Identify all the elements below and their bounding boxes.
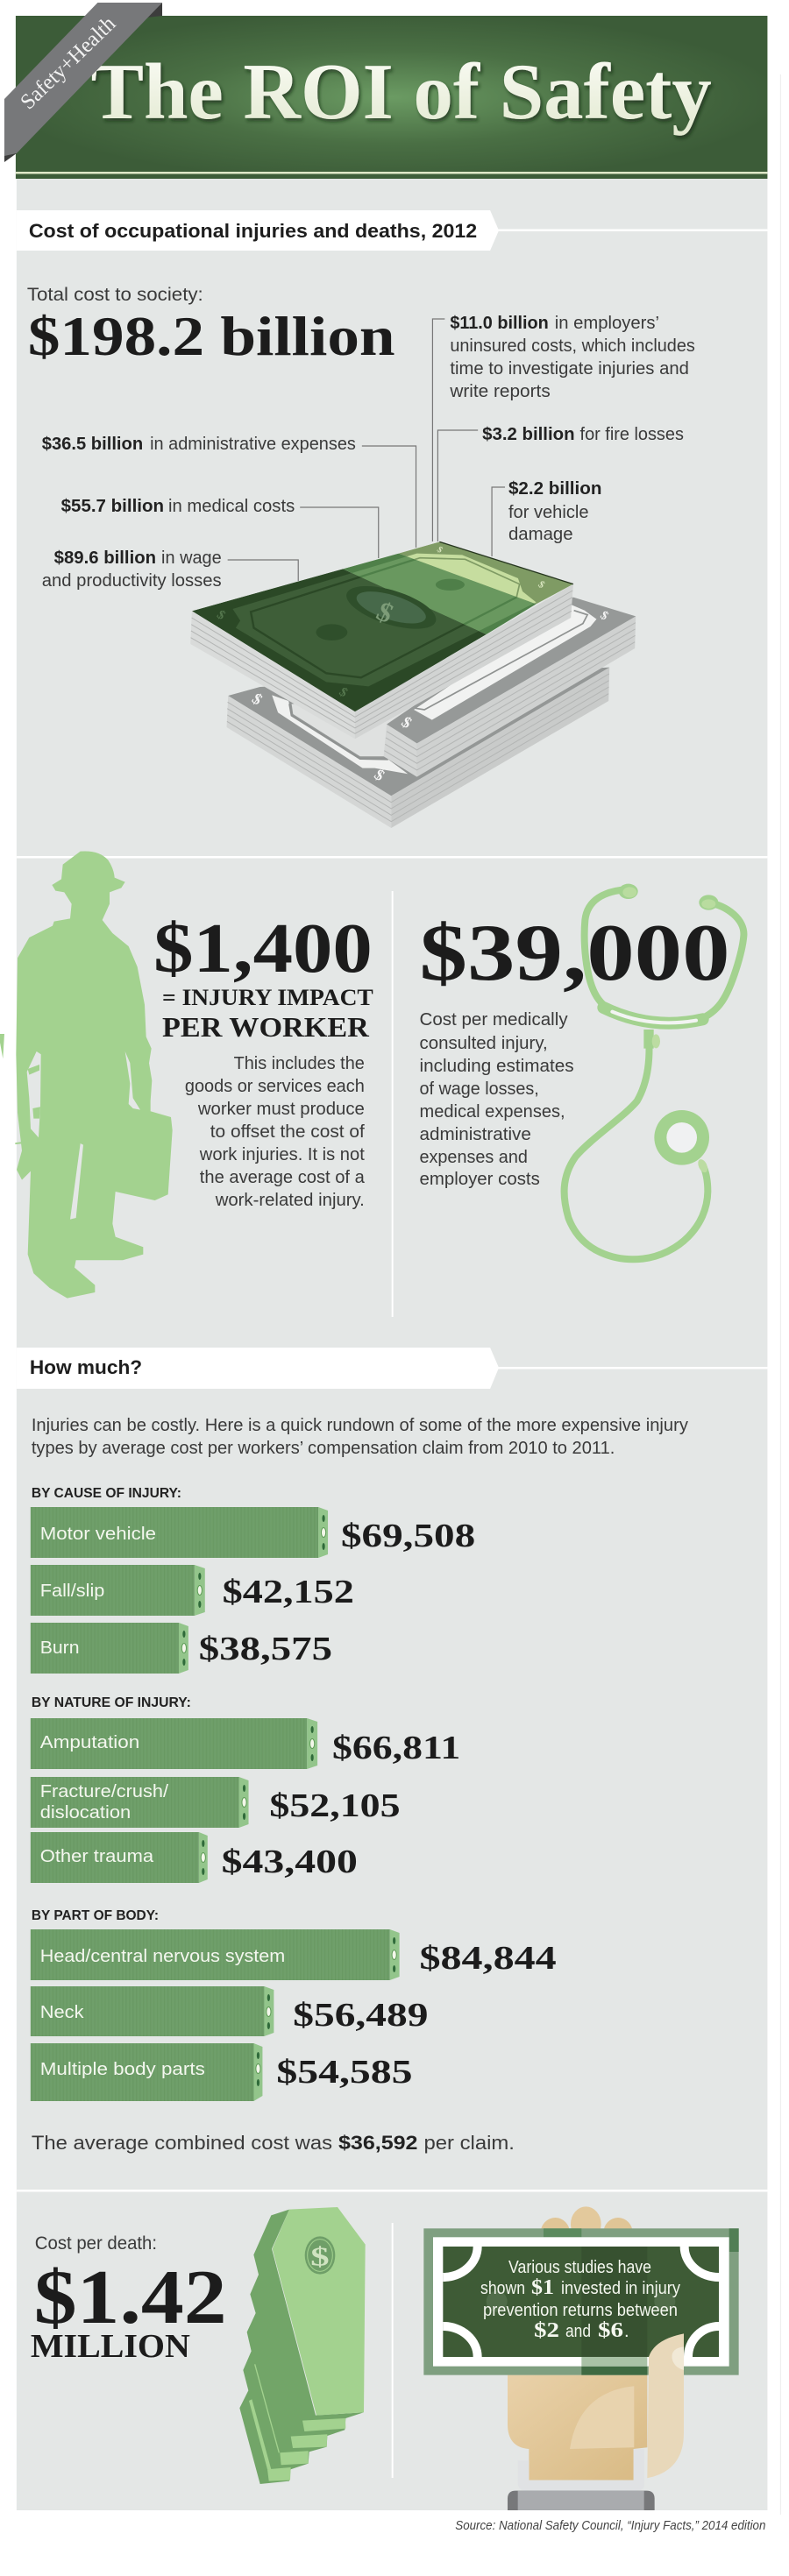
bar: neck <box>31 1986 428 2036</box>
intro text <box>32 1416 688 1458</box>
stat: injury impact per worker: $1,400 <box>153 910 373 987</box>
divider <box>17 856 767 859</box>
callout: vehicle: $2.2 billion <box>508 479 601 499</box>
description: administrative <box>419 1125 531 1144</box>
total cost block: $198.2 billion <box>28 305 395 367</box>
top stack: $ <box>435 545 444 556</box>
title banner <box>4 3 767 179</box>
bar: neck: $56,489 <box>293 1997 428 2034</box>
description: to offset the cost of <box>210 1122 365 1142</box>
description: including estimates <box>419 1057 574 1076</box>
divider <box>17 2190 767 2192</box>
icon: coffin of money <box>239 2207 366 2484</box>
bar: burn <box>31 1623 332 1674</box>
bar: head: $84,844 <box>419 1940 557 1977</box>
intro text: Injuries can be costly. Here is a quick rundown of some of the more expensive injury <box>32 1416 688 1435</box>
stat: cost per death <box>31 2233 227 2365</box>
callout: wage <box>42 548 298 591</box>
total cost block: Total cost to society: <box>27 285 203 305</box>
description <box>419 1010 574 1189</box>
text: average combined cost: The average combined cost was <box>32 2132 332 2154</box>
chart: by part of body <box>31 1908 557 2101</box>
callout: medical: in medical costs <box>168 497 295 516</box>
bar: multiple: $54,585 <box>276 2054 413 2091</box>
bar: fall/slip: $42,152 <box>223 1574 354 1610</box>
total cost block <box>27 285 395 367</box>
callout: uninsured costs: write reports <box>449 382 551 401</box>
bar: head: Head/central nervous system <box>40 1947 285 1966</box>
callout: administrative: in administrative expenses <box>150 435 356 454</box>
callout: uninsured costs: uninsured costs, which includes <box>450 336 695 356</box>
icon: stacks of money <box>190 541 636 828</box>
section header: cost of injuries <box>17 210 767 251</box>
callout: fire losses: $3.2 billion <box>482 425 575 444</box>
text: average combined cost: $36,592 <box>338 2132 418 2154</box>
middle stack <box>384 598 636 777</box>
chart: by cause of injury <box>31 1486 475 1674</box>
description: Cost per medically <box>419 1010 568 1030</box>
callout: uninsured costs: in employers’ <box>555 314 659 333</box>
callout: administrative: $36.5 billion <box>42 435 143 454</box>
callout: medical: $55.7 billion <box>61 497 164 516</box>
chart: by nature of injury: BY NATURE OF INJURY: <box>32 1695 191 1710</box>
light section of bill <box>399 541 572 605</box>
stat: cost per death: $1.42 <box>34 2254 227 2339</box>
callout: uninsured costs: time to investigate injuries and <box>450 359 689 379</box>
bar: head <box>31 1929 557 1980</box>
stat: cost per death: MILLION <box>31 2328 190 2365</box>
bar: multiple: Multiple body parts <box>40 2060 205 2079</box>
stat: injury impact per worker: = INJURY IMPACT <box>162 985 373 1010</box>
stat: cost per death: Cost per death: <box>35 2233 157 2254</box>
bar: burn: Burn <box>40 1638 80 1658</box>
description: work injuries. It is not <box>199 1145 365 1164</box>
bar: amputation: Amputation <box>40 1733 139 1752</box>
chart: by nature of injury <box>31 1695 460 1883</box>
ribbon: Safety+Health: Safety+Health <box>16 11 121 114</box>
bill note text: . <box>624 2322 629 2341</box>
bar: motor vehicle: $69,508 <box>341 1518 475 1554</box>
description: consulted injury, <box>419 1034 548 1053</box>
title: The ROI of Safety <box>90 47 712 136</box>
bar: motor vehicle: Motor vehicle <box>40 1525 156 1544</box>
description <box>185 1054 366 1210</box>
bar: neck: Neck <box>40 2003 84 2022</box>
top stack: $ <box>337 685 351 700</box>
text: average combined cost: per claim. <box>423 2132 515 2154</box>
callout: wage: and productivity losses <box>42 571 222 591</box>
stat: cost per medically consulted injury <box>419 908 730 1189</box>
bar: motor vehicle <box>31 1507 475 1558</box>
callout: fire losses: for fire losses <box>580 425 684 444</box>
icon: hand holding bill <box>409 2206 753 2510</box>
stat: injury impact per worker: PER WORKER <box>162 1012 370 1043</box>
description: of wage losses, <box>419 1079 539 1099</box>
bar: other trauma: Other trauma <box>40 1847 154 1866</box>
bill note text: $6 <box>598 2319 623 2342</box>
bar: fracture: $52,105 <box>269 1787 401 1824</box>
callout: vehicle: for vehicle <box>508 503 588 522</box>
bill note text: prevention returns between <box>483 2301 678 2320</box>
top stack: $ <box>372 595 399 629</box>
chart: by part of body: BY PART OF BODY: <box>32 1908 159 1923</box>
callout: administrative <box>42 435 416 548</box>
mid section of bill <box>343 554 537 634</box>
bill note text <box>480 2258 680 2342</box>
intro text: types by average cost per workers’ compensation claim from 2010 to 2011. <box>32 1439 615 1458</box>
top stack <box>190 541 573 739</box>
bar: fall/slip <box>31 1565 354 1616</box>
section header: how much: How much? <box>30 1356 142 1378</box>
callout: uninsured costs <box>432 314 695 541</box>
bill note text: Various studies have <box>508 2258 651 2277</box>
icon: stethoscope <box>565 884 743 1259</box>
icon: coffin of money: $ <box>310 2241 330 2271</box>
description: worker must produce <box>197 1100 365 1119</box>
chart: by cause of injury: BY CAUSE OF INJURY: <box>32 1486 181 1501</box>
callout: uninsured costs: $11.0 billion <box>450 314 549 333</box>
bar: fall/slip: Fall/slip <box>40 1582 104 1601</box>
description: medical expenses, <box>419 1102 565 1122</box>
description: work-related injury. <box>215 1191 365 1210</box>
section header: how much <box>17 1348 767 1389</box>
callout: vehicle <box>492 479 601 556</box>
bar: fracture: Fracture/crush/ <box>40 1782 168 1801</box>
description: employer costs <box>419 1170 540 1189</box>
middle stack: $ <box>398 713 416 732</box>
top stack: $ <box>214 608 228 623</box>
bill note text: $1 <box>531 2276 554 2299</box>
bar: amputation <box>31 1718 460 1769</box>
bar: fracture <box>31 1777 401 1828</box>
bar: amputation: $66,811 <box>332 1730 460 1766</box>
callout: vehicle: damage <box>508 525 573 544</box>
top stack: $ <box>537 578 547 591</box>
section header: cost of injuries: Cost of occupational injuries and deaths, 2012 <box>29 220 477 242</box>
bill note text: shown <box>480 2279 525 2298</box>
callout: wage: in wage <box>161 548 222 568</box>
icon: worker silhouette <box>0 851 173 1299</box>
description: expenses and <box>419 1148 528 1167</box>
middle stack: $ <box>598 608 611 623</box>
bottom stack: $ <box>249 690 266 708</box>
dark section of bill <box>192 570 486 711</box>
bar: fracture: dislocation <box>40 1803 131 1822</box>
ribbon: Safety+Health <box>4 3 162 162</box>
bar: burn: $38,575 <box>199 1631 332 1667</box>
bill <box>423 2228 739 2375</box>
description: This includes the <box>234 1054 365 1073</box>
bill note text: invested in injury <box>561 2279 680 2298</box>
bottom stack: $ <box>371 766 388 784</box>
callout: wage: $89.6 billion <box>54 548 156 568</box>
bottom stack <box>227 668 609 828</box>
callout: fire losses <box>437 425 684 541</box>
bar: other trauma: $43,400 <box>222 1844 358 1880</box>
description: goods or services each <box>185 1077 365 1096</box>
stat: injury impact per worker <box>153 910 373 1210</box>
bar: other trauma <box>31 1832 358 1883</box>
stat: cost per medically consulted injury: $39,000 <box>419 908 730 997</box>
bill note text: and <box>565 2322 591 2341</box>
bar: multiple <box>31 2043 413 2101</box>
description: the average cost of a <box>200 1168 366 1187</box>
callout: medical <box>61 497 379 558</box>
bill note text: $2 <box>534 2319 559 2342</box>
